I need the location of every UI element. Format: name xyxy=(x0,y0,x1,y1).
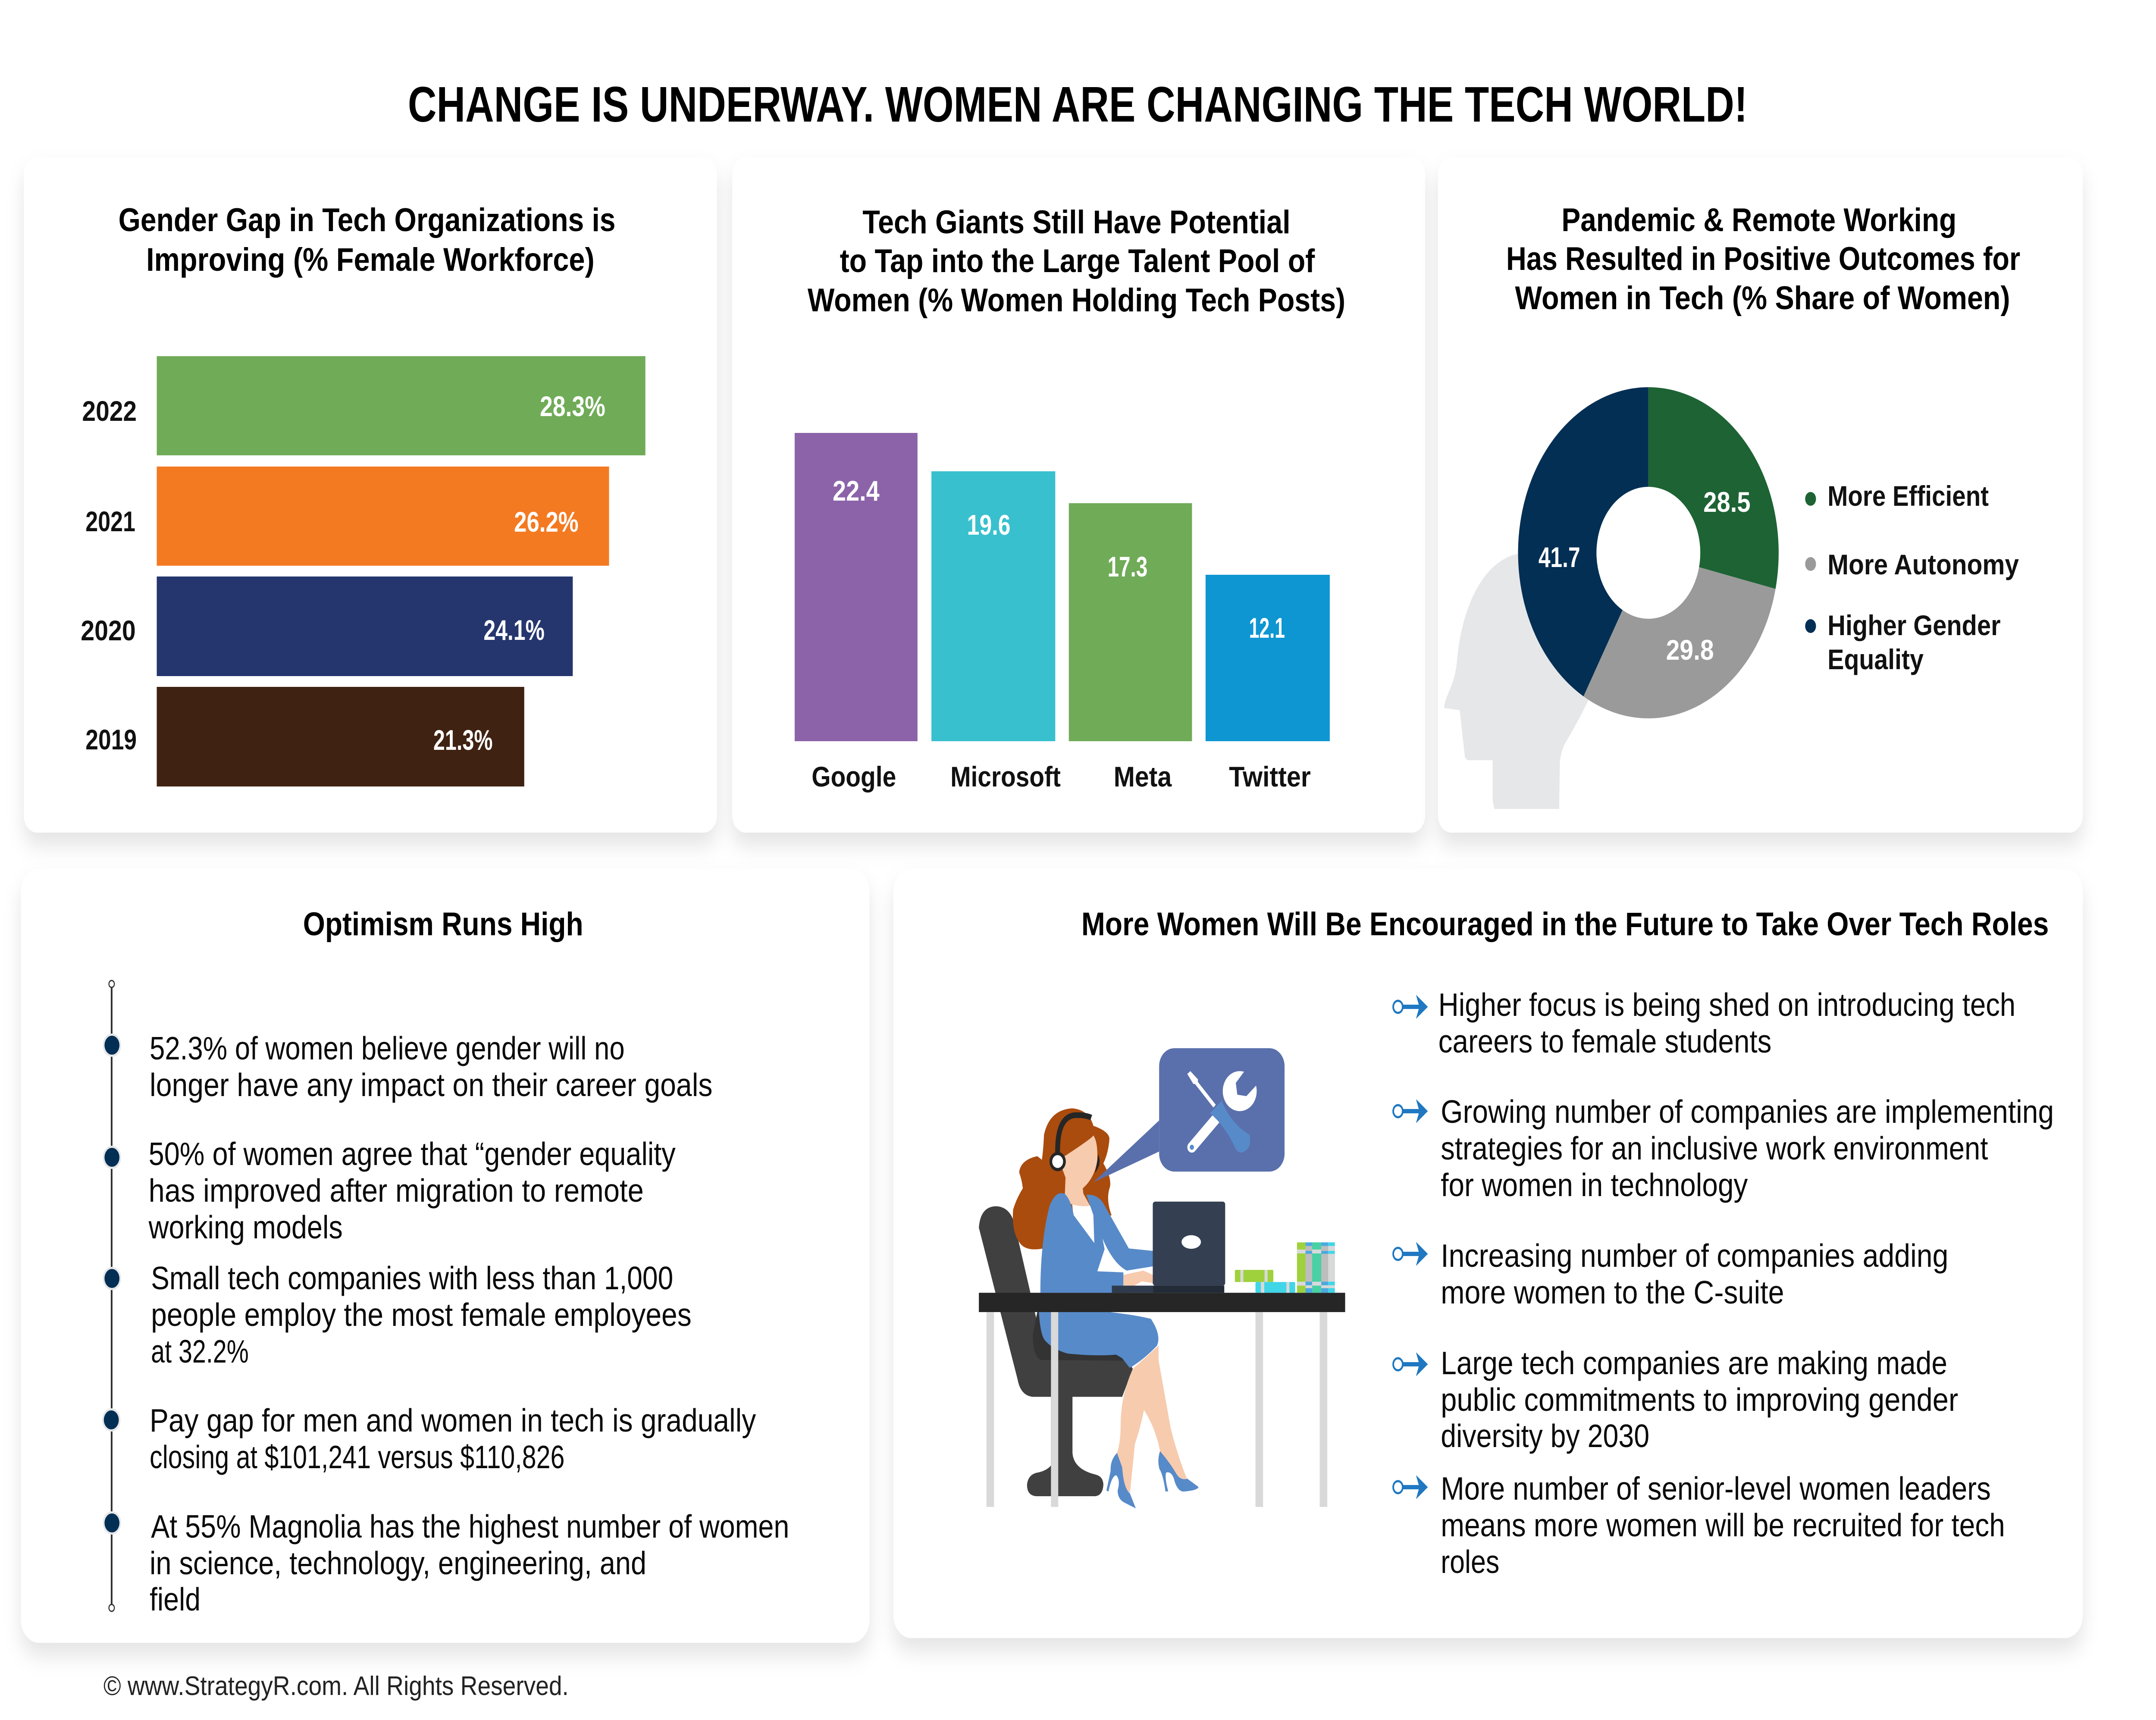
bar 2020 xyxy=(81,576,573,676)
text: item 3: Small tech companies with less than 1,000 xyxy=(151,1260,673,1297)
list item 2: for women in technology xyxy=(1441,1167,1748,1203)
donut chart xyxy=(1518,387,1779,718)
text: item 3: at 32.2% xyxy=(151,1334,249,1370)
list item 3 xyxy=(1393,1238,1948,1311)
bar: Twitter: 12.1 xyxy=(1249,612,1285,644)
bar 2022: 28.3% xyxy=(540,390,605,422)
list item 5: roles xyxy=(1441,1544,1499,1580)
list item 3: more women to the C-suite xyxy=(1441,1275,1784,1311)
icon: head silhouette xyxy=(1444,554,1595,809)
icon: blazer xyxy=(1040,1193,1153,1293)
list item 5 xyxy=(1393,1471,2005,1580)
text: item 5: in science, technology, engineering, and xyxy=(150,1545,646,1582)
list item 1 xyxy=(1393,987,2015,1060)
bar 2020: 24.1% xyxy=(483,614,545,646)
text: item 1 xyxy=(150,1031,713,1103)
panel: gender gap xyxy=(24,157,717,833)
timeline xyxy=(102,981,121,1611)
icon: speech bubble with tools xyxy=(1094,1048,1285,1182)
text: item 3: people employ the most female employees xyxy=(151,1297,692,1333)
legend: Higher Gender xyxy=(1827,609,2001,641)
bar: Meta xyxy=(1069,503,1192,793)
list item 5: More number of senior-level women leaders xyxy=(1441,1471,1991,1507)
text: item 1: 52.3% of women believe gender will no xyxy=(150,1031,625,1067)
heading: tech giants: Tech Giants Still Have Potential xyxy=(862,204,1291,241)
icon: hair xyxy=(1013,1108,1112,1250)
heading: future roles: More Women Will Be Encouraged in the Future to Take Over Tech Roles xyxy=(1081,906,2049,943)
text: item 2: 50% of women agree that “gender equality xyxy=(149,1136,676,1172)
list item 3: Increasing number of companies adding xyxy=(1441,1238,1948,1274)
bar: Twitter xyxy=(1206,575,1330,793)
heading: pandemic xyxy=(1506,202,2020,316)
icon: laptop xyxy=(1112,1202,1225,1293)
list item 1: careers to female students xyxy=(1438,1024,1771,1060)
list item 4: Large tech companies are making made xyxy=(1441,1345,1947,1382)
text: item 5: At 55% Magnolia has the highest number of women xyxy=(151,1509,789,1545)
bar: Meta: 17.3 xyxy=(1107,551,1147,583)
bar 2021: 2021 xyxy=(85,505,135,537)
bar: Twitter: Twitter xyxy=(1229,761,1311,793)
icon: chair xyxy=(979,1206,1133,1496)
icon: legs xyxy=(1117,1346,1187,1492)
panel: tech giants xyxy=(732,157,1425,833)
heading: gender gap: Gender Gap in Tech Organizations is xyxy=(119,202,615,238)
bar 2019: 2019 xyxy=(85,724,137,755)
text: item 2 xyxy=(148,1136,676,1246)
icon: books xyxy=(1235,1242,1335,1293)
bar: Microsoft: Microsoft xyxy=(950,761,1061,793)
list item 4 xyxy=(1393,1345,1958,1454)
bar 2021: 26.2% xyxy=(514,506,579,538)
bar: Google xyxy=(795,433,918,793)
panel: future roles xyxy=(893,869,2083,1638)
list item 2: Growing number of companies are implementing xyxy=(1441,1094,2054,1130)
bar 2019 xyxy=(85,687,524,786)
heading: gender gap: Improving (% Female Workforce) xyxy=(146,241,595,278)
bar: Microsoft: 19.6 xyxy=(967,509,1010,541)
icon: dress xyxy=(1039,1312,1158,1368)
list item 5: means more women will be recruited for tech xyxy=(1441,1507,2005,1544)
bar 2019: 21.3% xyxy=(433,724,493,756)
list item 2 xyxy=(1393,1094,2054,1203)
text: item 3 xyxy=(151,1260,692,1370)
text: item 1: longer have any impact on their career goals xyxy=(150,1067,713,1103)
donut chart: 29.8 xyxy=(1666,634,1714,666)
legend: Equality xyxy=(1827,643,1924,675)
donut chart: 28.5 xyxy=(1703,486,1751,518)
text: item 4 xyxy=(150,1403,756,1476)
legend xyxy=(1805,480,2019,675)
bar 2022: 2022 xyxy=(82,395,137,427)
title: CHANGE IS UNDERWAY. WOMEN ARE CHANGING THE TECH WORLD! xyxy=(408,77,1748,133)
icon: desk xyxy=(979,1293,1345,1507)
bar: Google: 22.4 xyxy=(833,475,880,507)
bar 2020: 2020 xyxy=(81,614,136,646)
panel: pandemic and remote working xyxy=(1438,157,2083,833)
icon: hand xyxy=(1123,1271,1153,1286)
legend: More Efficient xyxy=(1827,480,1989,512)
list item 2: strategies for an inclusive work environment xyxy=(1441,1131,1988,1167)
list item 1: Higher focus is being shed on introducing tech xyxy=(1438,987,2015,1023)
illustration: woman at desk xyxy=(979,1048,1345,1508)
heading: tech giants xyxy=(808,204,1345,319)
text: item 2: has improved after migration to remote xyxy=(149,1173,644,1209)
list item 4: public commitments to improving gender xyxy=(1441,1382,1958,1418)
bar: Google: Google xyxy=(812,761,896,793)
donut chart: 41.7 xyxy=(1539,541,1580,573)
heading: gender gap xyxy=(119,202,615,278)
heading: pandemic: Pandemic & Remote Working xyxy=(1561,202,1956,238)
bar: Meta: Meta xyxy=(1114,761,1172,793)
heading: tech giants: Women (% Women Holding Tech Posts) xyxy=(808,282,1345,319)
list item 4: diversity by 2030 xyxy=(1441,1418,1649,1454)
text: item 5 xyxy=(150,1509,789,1618)
panel: optimism runs high xyxy=(21,869,869,1643)
heading: pandemic: Has Resulted in Positive Outcomes for xyxy=(1506,241,2020,277)
icon: headset xyxy=(1050,1115,1100,1173)
legend: More Autonomy xyxy=(1827,548,2019,580)
text: item 4: closing at $101,241 versus $110,826 xyxy=(150,1439,564,1476)
heading: tech giants: to Tap into the Large Talent Pool of xyxy=(840,243,1315,279)
text: item 5: field xyxy=(150,1582,201,1618)
bar 2021 xyxy=(85,467,609,566)
icon: shoes xyxy=(1106,1451,1198,1508)
text: item 4: Pay gap for men and women in tech is gradually xyxy=(150,1403,756,1439)
icon: face xyxy=(1062,1135,1097,1206)
footer: © www.StrategyR.com. All Rights Reserved. xyxy=(103,1671,569,1701)
bar 2022 xyxy=(82,356,646,455)
bar: Microsoft xyxy=(931,471,1061,793)
heading: optimism: Optimism Runs High xyxy=(303,906,583,943)
heading: pandemic: Women in Tech (% Share of Women) xyxy=(1515,280,2010,316)
text: item 2: working models xyxy=(148,1209,343,1246)
